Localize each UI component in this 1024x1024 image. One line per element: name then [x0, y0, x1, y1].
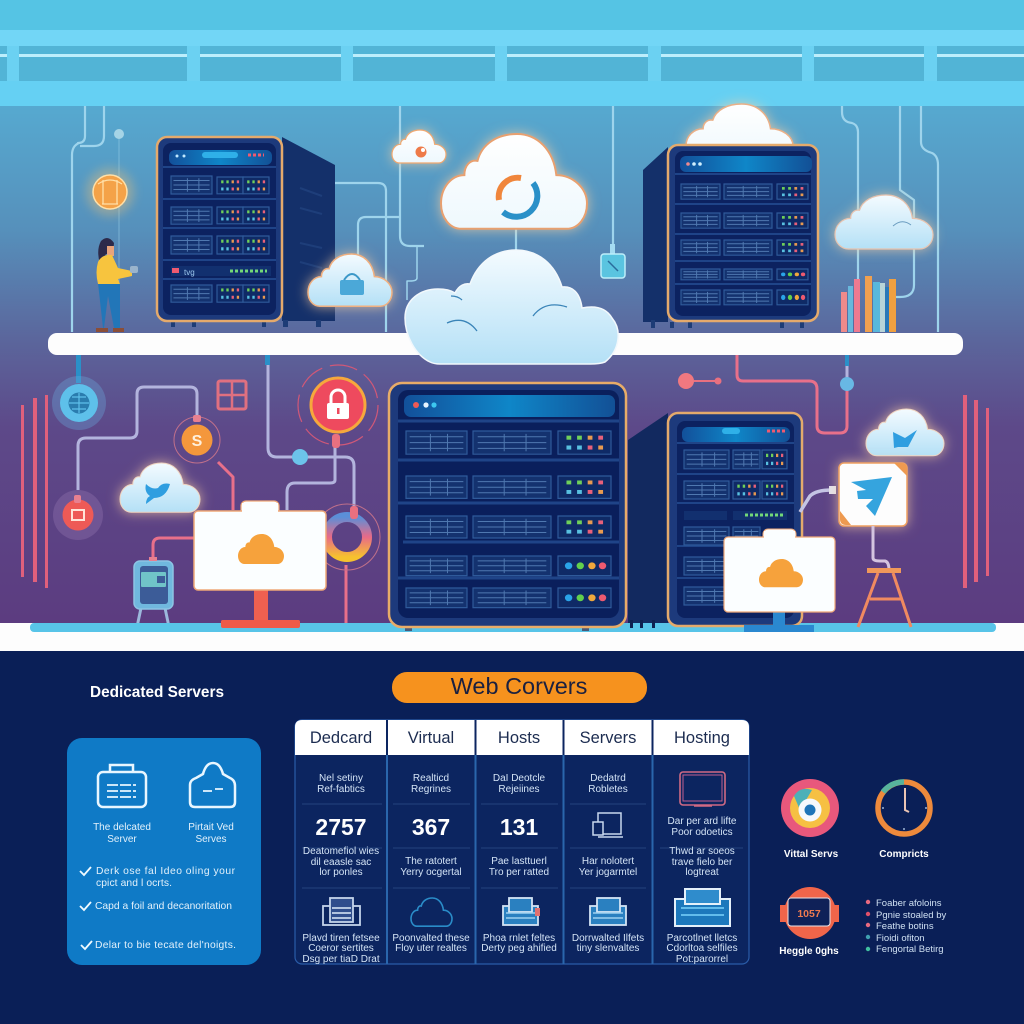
- upper connector lines: [72, 106, 938, 332]
- pink circuit with nodes: [678, 355, 854, 433]
- caption: private server: Pirtait Ved: [188, 822, 234, 833]
- column: hosts: Derty peg ahified: [481, 943, 557, 954]
- icon: S coin: S: [192, 433, 203, 450]
- re-draw monitor base: [221, 620, 300, 628]
- panel: dedicated servers: [67, 738, 261, 965]
- connector cable: [800, 486, 836, 512]
- column: dedcard: lor ponles: [319, 867, 363, 878]
- table header: Virtual: [408, 729, 454, 747]
- section heading: Dedicated Servers: [90, 684, 224, 701]
- column: hosts: 131: [500, 814, 538, 840]
- checklist: Delar to bie tecate del'noigts.: [95, 940, 236, 951]
- legend list: [866, 898, 946, 955]
- icon: counter badge: 1057: [797, 908, 821, 920]
- table header: [295, 720, 749, 755]
- icon: counter badge: [780, 887, 839, 939]
- table header: Dedcard: [310, 729, 372, 747]
- column: hosting: Thwd ar soeos: [669, 846, 735, 857]
- column: hosts: Phoa rnlet feltes: [483, 933, 555, 944]
- icon: server case: [98, 765, 146, 807]
- legend list: Pgnie stoaled by: [876, 910, 946, 921]
- column: virtual: [392, 773, 470, 954]
- column: hosting: Pot:parorrel: [676, 954, 728, 965]
- room backdrop: [0, 106, 1024, 624]
- node dot: [114, 129, 124, 139]
- icon: monitor: [680, 772, 725, 806]
- books: [841, 276, 896, 332]
- icon: printer: [323, 898, 360, 925]
- icon: paper plane: [851, 477, 892, 516]
- icon: globe node: [52, 376, 106, 430]
- upper white shelf: [48, 333, 963, 355]
- column: virtual: Floy uter realtes: [395, 943, 467, 954]
- icon: refresh arrows: [499, 178, 537, 217]
- column: dedcard: Coeror sertites: [308, 943, 374, 954]
- monitor: left folder screen: [194, 501, 326, 628]
- checklist: Derk ose fal Ideo oling your: [96, 866, 236, 877]
- column: virtual: Regrines: [411, 784, 451, 795]
- legend list: Foaber afoloins: [876, 898, 942, 909]
- legend list: Fengortal Betirg: [876, 944, 944, 955]
- icon: bird: [146, 484, 170, 504]
- icon: window: [218, 381, 246, 409]
- icon: virtual servers badge: [781, 779, 839, 837]
- column: hosts: Pae lasttuerl: [491, 856, 547, 867]
- label: counter: Heggle 0ghs: [779, 946, 839, 957]
- cloud: refresh: [441, 134, 587, 229]
- checklist: [80, 866, 236, 951]
- column: dedcard: Deatomefiol wies: [303, 846, 379, 857]
- column: servers: Har nolotert: [582, 856, 634, 867]
- icon: laptop: [675, 889, 730, 926]
- floor strip: [0, 623, 1024, 651]
- device terminal: [134, 557, 173, 627]
- rack: upper right: [643, 145, 818, 328]
- ceiling beam structure: [0, 0, 1024, 106]
- title pill: Web Corvers: [451, 673, 587, 699]
- column: virtual: Realticd: [413, 773, 449, 784]
- column: servers: Robletes: [588, 784, 628, 795]
- cloud: behind upper right rack: [686, 104, 793, 161]
- column: hosts: Tro per ratted: [489, 867, 549, 878]
- legend list: Feathe botins: [876, 921, 934, 932]
- icon: orange cloud: [759, 559, 803, 587]
- column: virtual: The ratotert: [405, 856, 457, 867]
- column: hosting: Cdorltoa selfiles: [666, 943, 738, 954]
- rack: lower right: [628, 413, 802, 628]
- lower connector lines: [76, 355, 354, 623]
- column: hosting: Dar per ard lifte: [668, 816, 737, 827]
- icon: S coin: [174, 415, 220, 463]
- column: hosting: Parcotlnet lletcs: [667, 933, 737, 944]
- label: virtual servers: Vittal Servs: [784, 849, 839, 860]
- column: dedcard: dil eaasle sac: [311, 857, 371, 868]
- column: hosting: Poor odoetics: [671, 827, 733, 838]
- icon: blue printer: [590, 898, 626, 925]
- legend list: Fioidi ofiton: [876, 933, 925, 944]
- caption: dedicated server: Server: [107, 834, 137, 845]
- cloud: twitter right: [866, 409, 944, 456]
- monitor: right folder screen: [724, 529, 835, 632]
- cloud: small top: [392, 130, 446, 163]
- column: hosting: logtreat: [685, 867, 719, 878]
- icon: orange cloud: [238, 534, 284, 564]
- column: virtual: 367: [412, 814, 450, 840]
- icon: device: [593, 813, 623, 837]
- icon: colour ring: [314, 504, 380, 570]
- checklist: Capd a foil and decanoritation: [95, 901, 232, 912]
- caption: dedicated server: The delcated: [93, 822, 151, 833]
- cloud: large central: [405, 250, 618, 364]
- column: hosting: trave fielo ber: [672, 857, 733, 868]
- column: dedcard: Ref-fabtics: [317, 784, 365, 795]
- icon: blue printer: [503, 898, 540, 925]
- column: servers: [572, 773, 644, 954]
- column: dedcard: Dsg per tiaD Drat: [302, 954, 380, 965]
- column: virtual: Poonvalted these: [392, 933, 470, 944]
- title pill: [392, 672, 647, 703]
- stool with cable: [858, 526, 911, 627]
- column: servers: Yer jogarmtel: [579, 867, 637, 878]
- caption: private server: Serves: [195, 834, 227, 845]
- column: dedcard: [302, 773, 380, 965]
- rack: upper left: tvg: [184, 268, 195, 277]
- cloud: small briefcase: [308, 254, 392, 306]
- column: dedcard: Nel setiny: [319, 773, 363, 784]
- icon: clock gauge: [878, 782, 930, 834]
- table header: Hosts: [498, 729, 540, 747]
- column: dedcard: Plavd tiren fetsee: [302, 933, 380, 944]
- person: [96, 238, 138, 332]
- icon: teal square tag: [601, 244, 625, 278]
- icon: orange globe: [86, 168, 134, 216]
- column: hosts: [481, 773, 557, 954]
- left red stripes: [21, 395, 48, 588]
- icon: red node: [53, 490, 103, 540]
- column: virtual: Yerry ocgertal: [400, 867, 462, 878]
- icon: cloud outline: [411, 898, 452, 926]
- right red stripes: [963, 395, 989, 588]
- label: comparisons: Compricts: [879, 849, 929, 860]
- column: servers: Dorrwalted Ilfets: [572, 933, 644, 944]
- icon: padlock: [298, 365, 378, 448]
- rack: upper left: [157, 137, 335, 327]
- table header: Hosting: [674, 729, 730, 747]
- column: dedcard: 2757: [315, 814, 367, 840]
- icon: cloud box: [190, 763, 235, 807]
- checklist: cpict and l ocrts.: [96, 878, 172, 889]
- comparison table: [295, 720, 749, 965]
- card: paper plane: [839, 463, 907, 526]
- column: servers: Dedatrd: [590, 773, 626, 784]
- column: hosts: DaI Deotcle: [493, 773, 546, 784]
- column: servers: tiny slenvaltes: [577, 943, 639, 954]
- column: hosts: Rejeiines: [498, 784, 540, 795]
- cloud: twitter left: [120, 463, 200, 512]
- rack: central: [389, 383, 626, 631]
- cloud: right: [835, 195, 933, 249]
- column: hosting: [666, 772, 738, 965]
- table header: Servers: [580, 729, 636, 747]
